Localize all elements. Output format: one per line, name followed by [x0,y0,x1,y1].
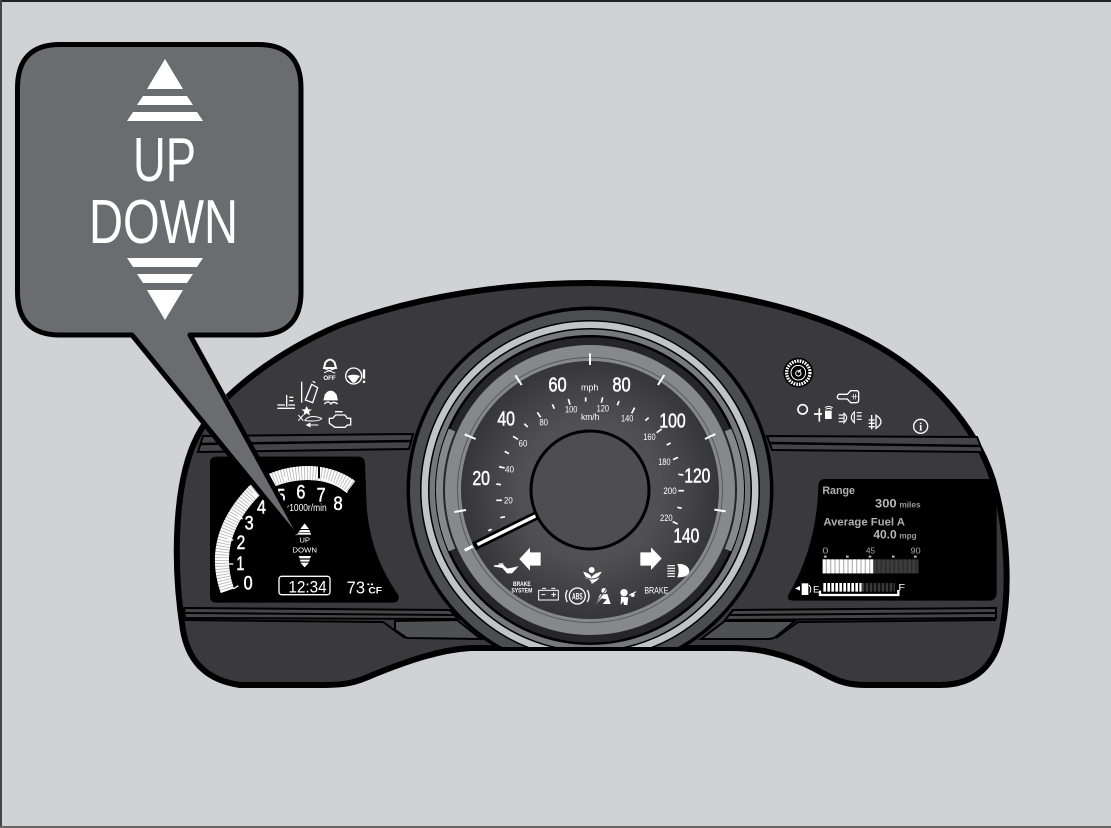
clock: 12:34 [288,577,327,596]
fuel gauge: F [898,582,905,592]
mph numbers: 120 [684,464,710,487]
warning icons left [277,360,364,427]
icon: coolant temperature [277,395,295,408]
brake label: BRAKE [644,585,668,595]
fuel economy bar: 0 [822,546,829,556]
icon: steering warning [346,368,364,384]
icon: ABS: ABS [572,591,583,601]
tachometer numbers: 1 [236,554,244,575]
right LCD display and icons [783,358,997,601]
brake system label [512,582,532,592]
trip text: Average Fuel A [823,516,905,528]
lower left trim strip [184,608,458,638]
unit labels: mph [581,383,598,393]
km/h numbers: 160 [643,432,656,442]
trip text [822,485,921,542]
tachometer numbers: 6 [296,482,305,503]
trip text: 40.0 [873,528,897,542]
icon: key [837,391,859,403]
fuel economy bar: 90 [911,546,921,556]
icon: check engine [329,412,351,427]
tachometer numbers: 0 [244,573,253,594]
outside temperature: CF [368,585,382,595]
km/h numbers: 60 [519,439,527,449]
UP label: UP [133,126,196,195]
LCD panel [788,479,997,601]
major ticks [454,353,726,512]
right turn arrow [640,547,662,570]
left LCD display [210,360,399,603]
km/h numbers: 100 [565,405,577,415]
unit labels: km/h [581,412,599,422]
icon: TPMS [783,358,813,388]
speedometer scale in zoom coordinates [454,353,726,605]
dashboard cluster body [177,283,1007,685]
trip text: Range [822,485,855,497]
icon: immobilizer [814,406,833,422]
mph numbers: 100 [659,409,686,432]
callout bubble [18,44,301,532]
km/h numbers: 80 [539,418,548,428]
mini up/down indicator: UP [299,535,310,544]
km/h numbers: 140 [621,414,633,424]
mph numbers: 60 [548,374,567,397]
fuel gauge [795,582,905,595]
mph numbers: 80 [612,374,631,397]
pointer edge highlight [160,362,296,532]
fuel economy bar: 45 [866,546,875,556]
icon: traction off: OFF [323,375,336,382]
icon: oil pressure [494,564,517,573]
tachometer arc [222,463,351,591]
icon: lane assist [302,381,318,403]
icon: eco leaf [583,567,602,584]
tachometer numbers: 8 [333,494,343,515]
km/h numbers [504,404,677,523]
icon: airbag [620,589,636,605]
tachometer numbers [236,482,343,594]
lower right trim strip [725,608,996,638]
mph numbers: 40 [497,408,515,431]
km/h numbers: 20 [504,495,513,505]
trip text: miles [899,500,921,509]
icon: stability [324,392,338,404]
left turn arrow [519,548,541,571]
hub [531,431,649,549]
LCD panel [210,457,399,603]
km/h numbers: 40 [505,465,514,475]
icon: high beam [667,564,689,577]
upper right trim strip [767,436,983,452]
tachometer numbers: 4 [257,497,266,518]
outside temperature [347,577,382,597]
mph numbers: 20 [472,467,490,490]
upper left trim strip [198,434,413,452]
down arrow [127,258,203,320]
bubble and pointer [18,44,301,532]
km/h numbers: 200 [663,486,677,496]
icon: collision [298,406,322,427]
icon: ABS [566,588,589,604]
km/h numbers: 220 [660,513,673,523]
tachometer numbers: 2 [237,533,245,554]
tachometer numbers: 7 [317,486,326,507]
icon: information [914,419,928,434]
trip text: mpg [899,532,917,541]
icon: lamp indicators [839,412,862,423]
brake system label: BRAKE [513,582,531,588]
speedometer gauge [406,306,774,674]
lower left trim panel [395,620,481,639]
icon: battery [539,588,558,600]
unit labels [582,384,599,420]
outside temperature: 73 [347,577,365,597]
fuel economy bar [822,546,921,566]
minor ticks [488,397,684,531]
lower right trim panel [701,621,795,639]
tachometer numbers: 3 [245,513,254,534]
km/h numbers: 120 [597,404,609,414]
mini up/down indicator [292,523,317,567]
mph numbers [472,374,710,547]
up arrow [127,59,203,121]
needle [465,515,537,550]
tachometer numbers: 5 [277,486,285,507]
icon: information: i [919,422,922,434]
icon: fog light [869,415,881,429]
mini up/down indicator: DOWN [292,546,317,555]
speedometer side highlights [439,430,741,550]
trip text: 300 [875,496,897,510]
brake system label: SYSTEM [511,588,532,594]
DOWN label: DOWN [89,188,238,257]
km/h numbers: 180 [658,457,671,467]
fuel gauge: E [813,584,819,594]
tachometer unit: x1000r/min [285,503,327,514]
icon: indicator ring [798,405,807,414]
icon: seat belt [596,588,611,604]
mph numbers: 140 [673,524,699,547]
